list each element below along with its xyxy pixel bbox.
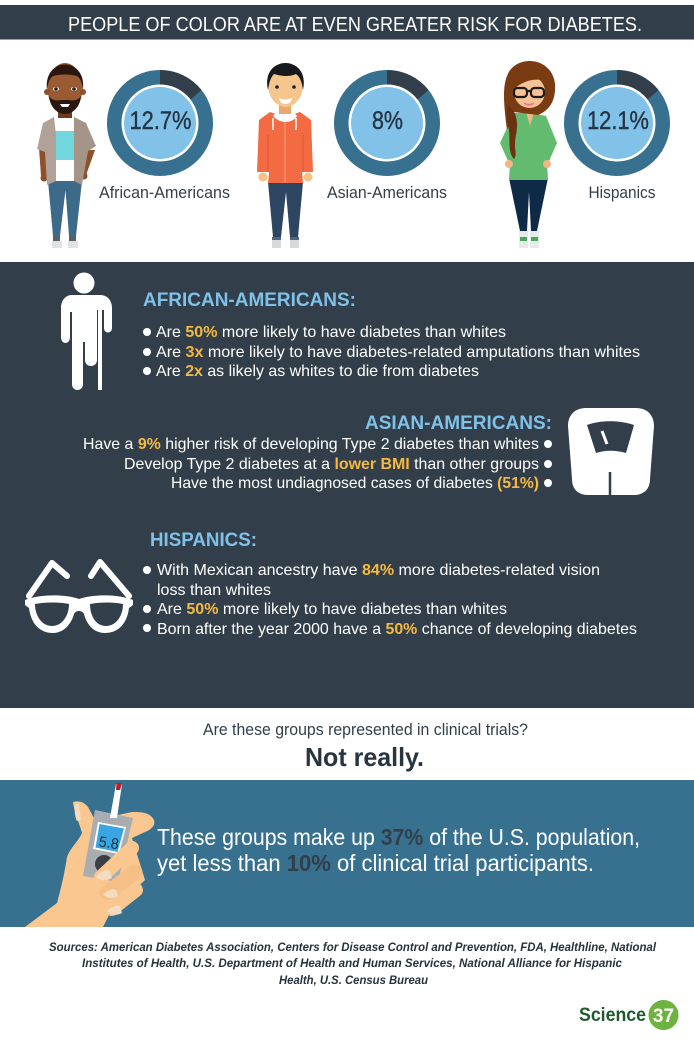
list: African-American facts: Are 3x more likely to have diabetes-related amputations than whites: [156, 344, 640, 361]
icon: glasses: [25, 562, 133, 633]
list: Hispanic facts: With Mexican ancestry have 84% more diabetes-related vision: [157, 562, 600, 579]
sources: Institutes of Health, U.S. Department of Health and Human Services, National Alliance for Hispanic: [82, 956, 622, 970]
panel: risk details: [0, 262, 694, 708]
illustration: Hispanic woman: [500, 61, 557, 248]
sources: [49, 940, 657, 987]
donut chart: 8%: 8%: [372, 107, 403, 135]
donut chart: 8%: [342, 70, 432, 168]
label: African-Americans: African-Americans: [99, 184, 230, 202]
list: Asian-American facts: Have the most undiagnosed cases of diabetes (51%): [171, 475, 539, 492]
list: African-American facts: [143, 324, 640, 380]
logo: Science 37: Science: [579, 1004, 646, 1026]
illustration: Asian-American man: [257, 63, 313, 248]
icon: bathroom scale: [568, 408, 654, 495]
sources: Health, U.S. Census Bureau: [279, 973, 429, 987]
title banner: [0, 5, 694, 40]
list: African-American facts: Are 2x as likely as whites to die from diabetes: [156, 363, 479, 380]
icon: hand holding glucose meter: 5.8: [98, 834, 120, 853]
icon: person with amputated leg and crutch: [61, 272, 112, 390]
question text: Are these groups represented in clinical trials?: [203, 721, 528, 739]
heading: Hispanics: HISPANICS:: [150, 530, 257, 551]
logo: Science 37: [579, 1000, 678, 1030]
illustration: African-American man: [37, 63, 96, 248]
label: Asian-Americans: Asian-Americans: [327, 184, 447, 202]
statistic text: These groups make up 37% of the U.S. population,: [157, 824, 640, 850]
list: Asian-American facts: Develop Type 2 diabetes at a lower BMI than other groups: [124, 456, 539, 473]
statistic text: yet less than 10% of clinical trial participants.: [157, 850, 594, 876]
list: Asian-American facts: Have a 9% higher risk of developing Type 2 diabetes than whites: [83, 436, 539, 453]
answer: not really: Not really.: [305, 742, 424, 772]
logo: Science 37: 37: [653, 1006, 674, 1027]
heading: Asian-Americans: ASIAN-AMERICANS:: [365, 413, 552, 434]
list: Asian-American facts: [83, 436, 552, 492]
list: Hispanic facts: [143, 562, 637, 638]
statistic text: [157, 824, 640, 876]
panel: clinical trial statistic: [0, 780, 694, 927]
list: Hispanic facts: Born after the year 2000 have a 50% chance of developing diabetes: [157, 621, 637, 638]
donut chart: 12.7%: 12.7%: [130, 107, 192, 135]
sources: Sources: American Diabetes Association, Centers for Disease Control and Prevention, FDA, Healthline, National: [49, 940, 657, 954]
title banner: PEOPLE OF COLOR ARE AT EVEN GREATER RISK FOR DIABETES.: [68, 14, 642, 36]
donut chart: 12.1%: 12.1%: [587, 107, 649, 135]
list: African-American facts: Are 50% more likely to have diabetes than whites: [156, 324, 506, 341]
list: Hispanic facts: loss than whites: [157, 582, 271, 599]
label: Hispanics: Hispanics: [588, 184, 656, 202]
list: Hispanic facts: Are 50% more likely to have diabetes than whites: [157, 601, 507, 618]
donut chart: 12.7%: [114, 70, 206, 168]
donut chart: 12.1%: [572, 70, 662, 168]
heading: African-Americans: AFRICAN-AMERICANS:: [143, 290, 356, 311]
icon: hand holding glucose meter: [25, 783, 154, 927]
